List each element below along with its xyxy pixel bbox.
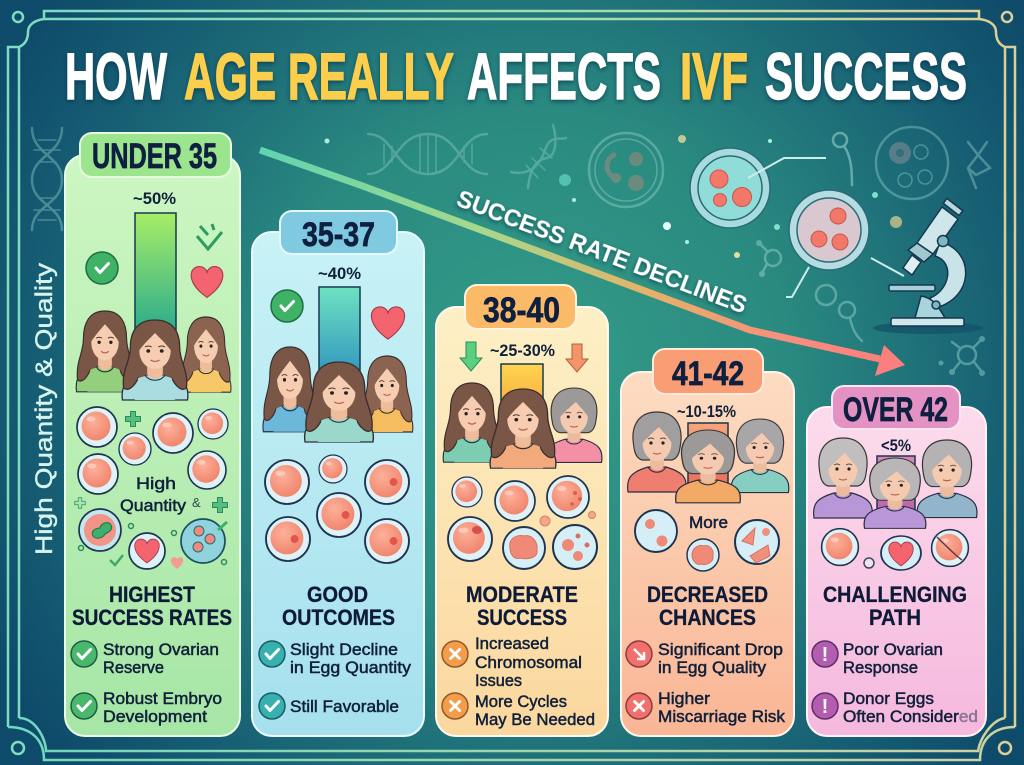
age tab: UNDER 35 [92, 137, 217, 176]
age tab [653, 349, 763, 394]
percentage: ~50% [133, 189, 176, 208]
percentage: <5% [881, 436, 911, 455]
bullet: slight decline [259, 640, 412, 677]
age tab [832, 386, 960, 429]
eggs label: & [192, 495, 201, 510]
icon: orange down arrow [566, 344, 588, 372]
bullet: chromosomal issues: Issues [475, 671, 522, 690]
percentage: ~10-15% [677, 402, 736, 421]
panel: 38-40 [436, 285, 608, 736]
age tab: 41-42 [672, 355, 744, 393]
bullet: poor ovarian response: Response [843, 658, 918, 677]
heading: DECREASED [647, 582, 768, 607]
bullet: strong ovarian reserve [71, 640, 219, 677]
percentage: ~25-30% [490, 341, 555, 360]
bullet: donor eggs: Donor Eggs [843, 689, 934, 708]
women group [628, 412, 789, 503]
heading [282, 582, 395, 630]
arrow label: SUCCESS RATE DECLINES [453, 185, 751, 319]
women group [443, 383, 602, 468]
heading: PATH [869, 605, 921, 630]
vertical label: High Quantity & Quality [31, 263, 58, 555]
women group [814, 438, 977, 528]
heading [647, 582, 768, 630]
bullet: significant drop: in Egg Quality [658, 658, 767, 677]
heading: SUCCESS RATES [72, 605, 232, 630]
bullet: poor ovarian response: Poor Ovarian [843, 640, 943, 659]
bar [135, 213, 176, 353]
icon: DNA diagonal [511, 125, 566, 188]
bullet: poor ovarian response: ! [822, 644, 828, 666]
bar [877, 456, 915, 518]
age tab [280, 211, 397, 254]
icon: heart [371, 307, 405, 339]
heading: CHANCES [659, 605, 756, 630]
icon: double check [197, 224, 222, 249]
icon: microscope [873, 198, 983, 334]
bar [501, 364, 543, 419]
bullet: miscarriage risk [626, 689, 785, 726]
heading [466, 582, 578, 630]
icon: faint cell dish [876, 127, 948, 199]
decorative science background [32, 125, 990, 376]
bar [688, 423, 728, 488]
eggs cluster [265, 455, 409, 563]
bullet: donor eggs: ! [822, 696, 828, 718]
age tab: OVER 42 [843, 391, 948, 429]
icon: hexagon molecule [756, 240, 781, 277]
heading [823, 582, 967, 630]
bullet: donor eggs: Often Considered [843, 707, 978, 726]
heading: HIGHEST [109, 582, 195, 607]
age tab: 38-40 [483, 291, 560, 330]
bullet: robust embryo development: Robust Embryo [103, 689, 222, 708]
heading: GOOD [307, 582, 368, 607]
women group [263, 347, 413, 442]
icon: molecule top right [968, 142, 990, 188]
icon: faint petri dish [589, 133, 663, 207]
eggs label [120, 474, 201, 515]
heading: OUTCOMES [282, 605, 395, 630]
petri dish with eggs 2 [786, 190, 904, 297]
title [65, 39, 967, 113]
bullet: robust embryo development: Development [103, 707, 207, 726]
eggs label: High [136, 474, 176, 493]
bullet: more cycles: May Be Needed [475, 710, 595, 729]
panel: 35-37 [252, 211, 424, 736]
title: AGE REALLY [184, 39, 454, 113]
bullet: poor ovarian response [812, 640, 943, 677]
eggs cluster [635, 510, 779, 571]
bullet: more cycles [442, 692, 595, 729]
title: HOW [65, 39, 167, 113]
title: AFFECTS [467, 39, 661, 113]
bullet: strong ovarian reserve: Reserve [103, 658, 164, 677]
bullet: slight decline: Slight Decline [290, 640, 398, 659]
arrow: success rate declines [260, 150, 905, 376]
bullet: miscarriage risk: Miscarriage Risk [658, 707, 785, 726]
icon: check badge [271, 290, 303, 322]
bullet: chromosomal issues [442, 634, 582, 690]
heading [72, 582, 232, 630]
heading: MODERATE [466, 582, 578, 607]
bullet: significant drop [626, 640, 783, 677]
icon: molecule lower right [938, 336, 985, 376]
petri dish with eggs 1 [690, 148, 826, 228]
bullet: miscarriage risk: Higher [658, 689, 710, 708]
age tab [80, 133, 231, 177]
women group [76, 311, 231, 400]
heading: CHALLENGING [823, 582, 967, 607]
icon: DNA horizontal [368, 134, 487, 174]
title: IVF [680, 39, 748, 113]
panel: under 35 [65, 133, 240, 736]
panel: 41-42 [621, 349, 794, 736]
bullet: chromosomal issues: Chromosomal [475, 653, 582, 672]
eggs label: More [689, 513, 728, 532]
eggs cluster [448, 476, 597, 569]
age tab: 35-37 [302, 216, 375, 254]
icon: heart [191, 267, 223, 297]
panel: over 42 [807, 386, 986, 736]
bullet: still favorable [259, 693, 399, 719]
icon: pin [833, 133, 852, 185]
sparkle dots [324, 135, 902, 258]
eggs label: Quantity [120, 496, 187, 515]
icon: check badge [86, 252, 118, 284]
bullet: significant drop: Significant Drop [658, 640, 783, 659]
bullet: still favorable: Still Favorable [290, 697, 399, 716]
icon: DNA left [32, 128, 62, 230]
bullet: strong ovarian reserve: Strong Ovarian [103, 640, 219, 659]
bullet: chromosomal issues: Increased [475, 634, 549, 653]
bullet: donor eggs [812, 689, 978, 726]
heading: SUCCESS [477, 605, 567, 630]
percentage: ~40% [318, 264, 361, 283]
eggs cluster [822, 529, 968, 570]
icon: loop probes [816, 285, 862, 341]
age tab [465, 285, 576, 330]
bullet: slight decline: in Egg Quantity [290, 658, 412, 677]
bullet: robust embryo development [71, 689, 222, 726]
bullet: more cycles: More Cycles [475, 692, 567, 711]
bar [319, 287, 360, 387]
eggs cluster [75, 407, 228, 569]
icon: green down arrow [460, 342, 482, 371]
